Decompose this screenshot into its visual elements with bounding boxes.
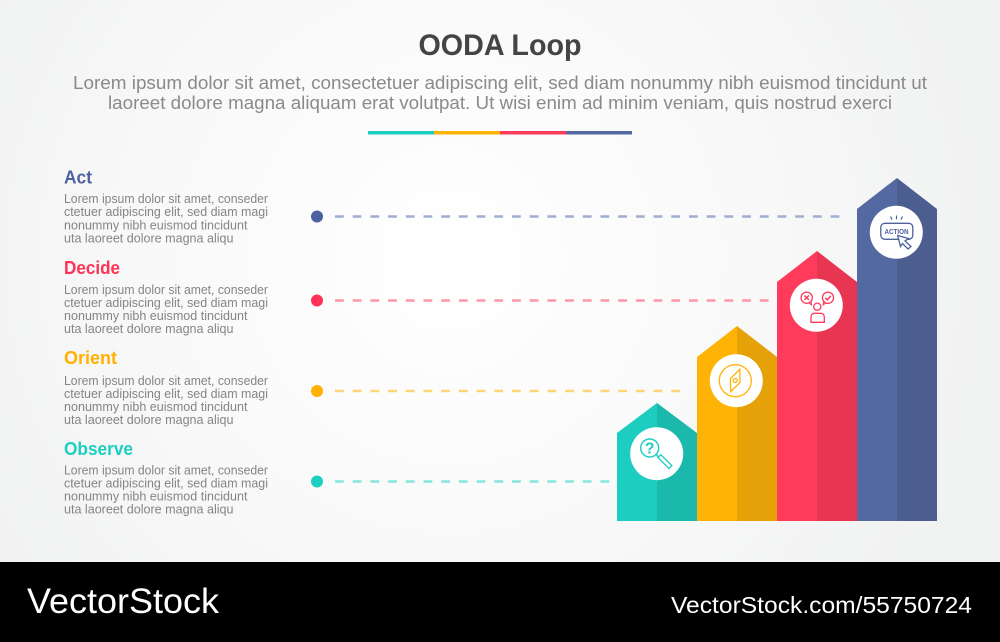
text block: Act: uta laoreet dolore magna aliqu [64,232,234,246]
text block: Decide: nonummy nibh euismod tincidunt [64,309,248,323]
text block: Act [64,168,268,246]
arrow bar chart [617,178,937,521]
text block: Observe: nonummy nibh euismod tincidunt [64,490,248,504]
arrow bar: Decide [777,251,857,521]
text block: Orient: uta laoreet dolore magna aliqu [64,413,234,427]
text block: Observe: uta laoreet dolore magna aliqu [64,502,234,516]
connector: Act [311,210,840,222]
text block: Orient: Lorem ipsum dolor sit amet, conseder [64,374,268,388]
subtitle text: laoreet dolore magna aliquam erat volutpat. Ut wisi enim ad minim veniam, quis nostrud exerci [108,93,892,113]
arrow bar: Orient [697,326,777,521]
connector: Orient [311,385,680,397]
text block: Observe [64,439,268,516]
icon: magnifier with question mark [630,427,683,480]
text block: Act: Act [64,168,92,188]
text block: Orient: ctetuer adipiscing elit, sed diam magi [64,387,268,401]
colour rule [368,131,632,134]
icon: person deciding [790,279,843,332]
subtitle text: Lorem ipsum dolor sit amet, consectetuer adipiscing elit, sed diam nonummy nibh euismod tincidunt ut [73,73,927,93]
text block: Act: Lorem ipsum dolor sit amet, conseder [64,192,268,206]
text block: Orient: nonummy nibh euismod tincidunt [64,400,248,414]
text block: Act: nonummy nibh euismod tincidunt [64,218,248,232]
text block: Decide: Decide [64,258,120,278]
icon: action button with cursor [870,206,923,259]
text block: Decide [64,258,268,336]
text block: Observe: ctetuer adipiscing elit, sed diam magi [64,476,268,490]
icon: magnifier with question mark: ? [645,441,654,458]
footer url text: VectorStock.com/55750724 [671,592,972,618]
text block: Decide: uta laoreet dolore magna aliqu [64,322,234,336]
icon: action button with cursor: ACTION [884,227,908,236]
text block: Observe: Lorem ipsum dolor sit amet, conseder [64,464,268,478]
text block: Orient [64,348,268,427]
text block: Orient: Orient [64,348,117,368]
icon: compass [710,354,763,407]
text block: Decide: ctetuer adipiscing elit, sed diam magi [64,296,268,310]
connector: Decide [311,294,770,306]
subtitle text [73,73,927,113]
connector: Observe [311,476,610,488]
text block: Observe: Observe [64,439,133,459]
text block: Decide: Lorem ipsum dolor sit amet, conseder [64,283,268,297]
text block: Act: ctetuer adipiscing elit, sed diam magi [64,205,268,219]
title: OODA Loop [418,29,582,62]
arrow bar: Act [857,178,937,521]
footer band [0,562,1000,642]
arrow bar: Observe [617,403,697,521]
footer logo text: VectorStock [27,582,220,621]
